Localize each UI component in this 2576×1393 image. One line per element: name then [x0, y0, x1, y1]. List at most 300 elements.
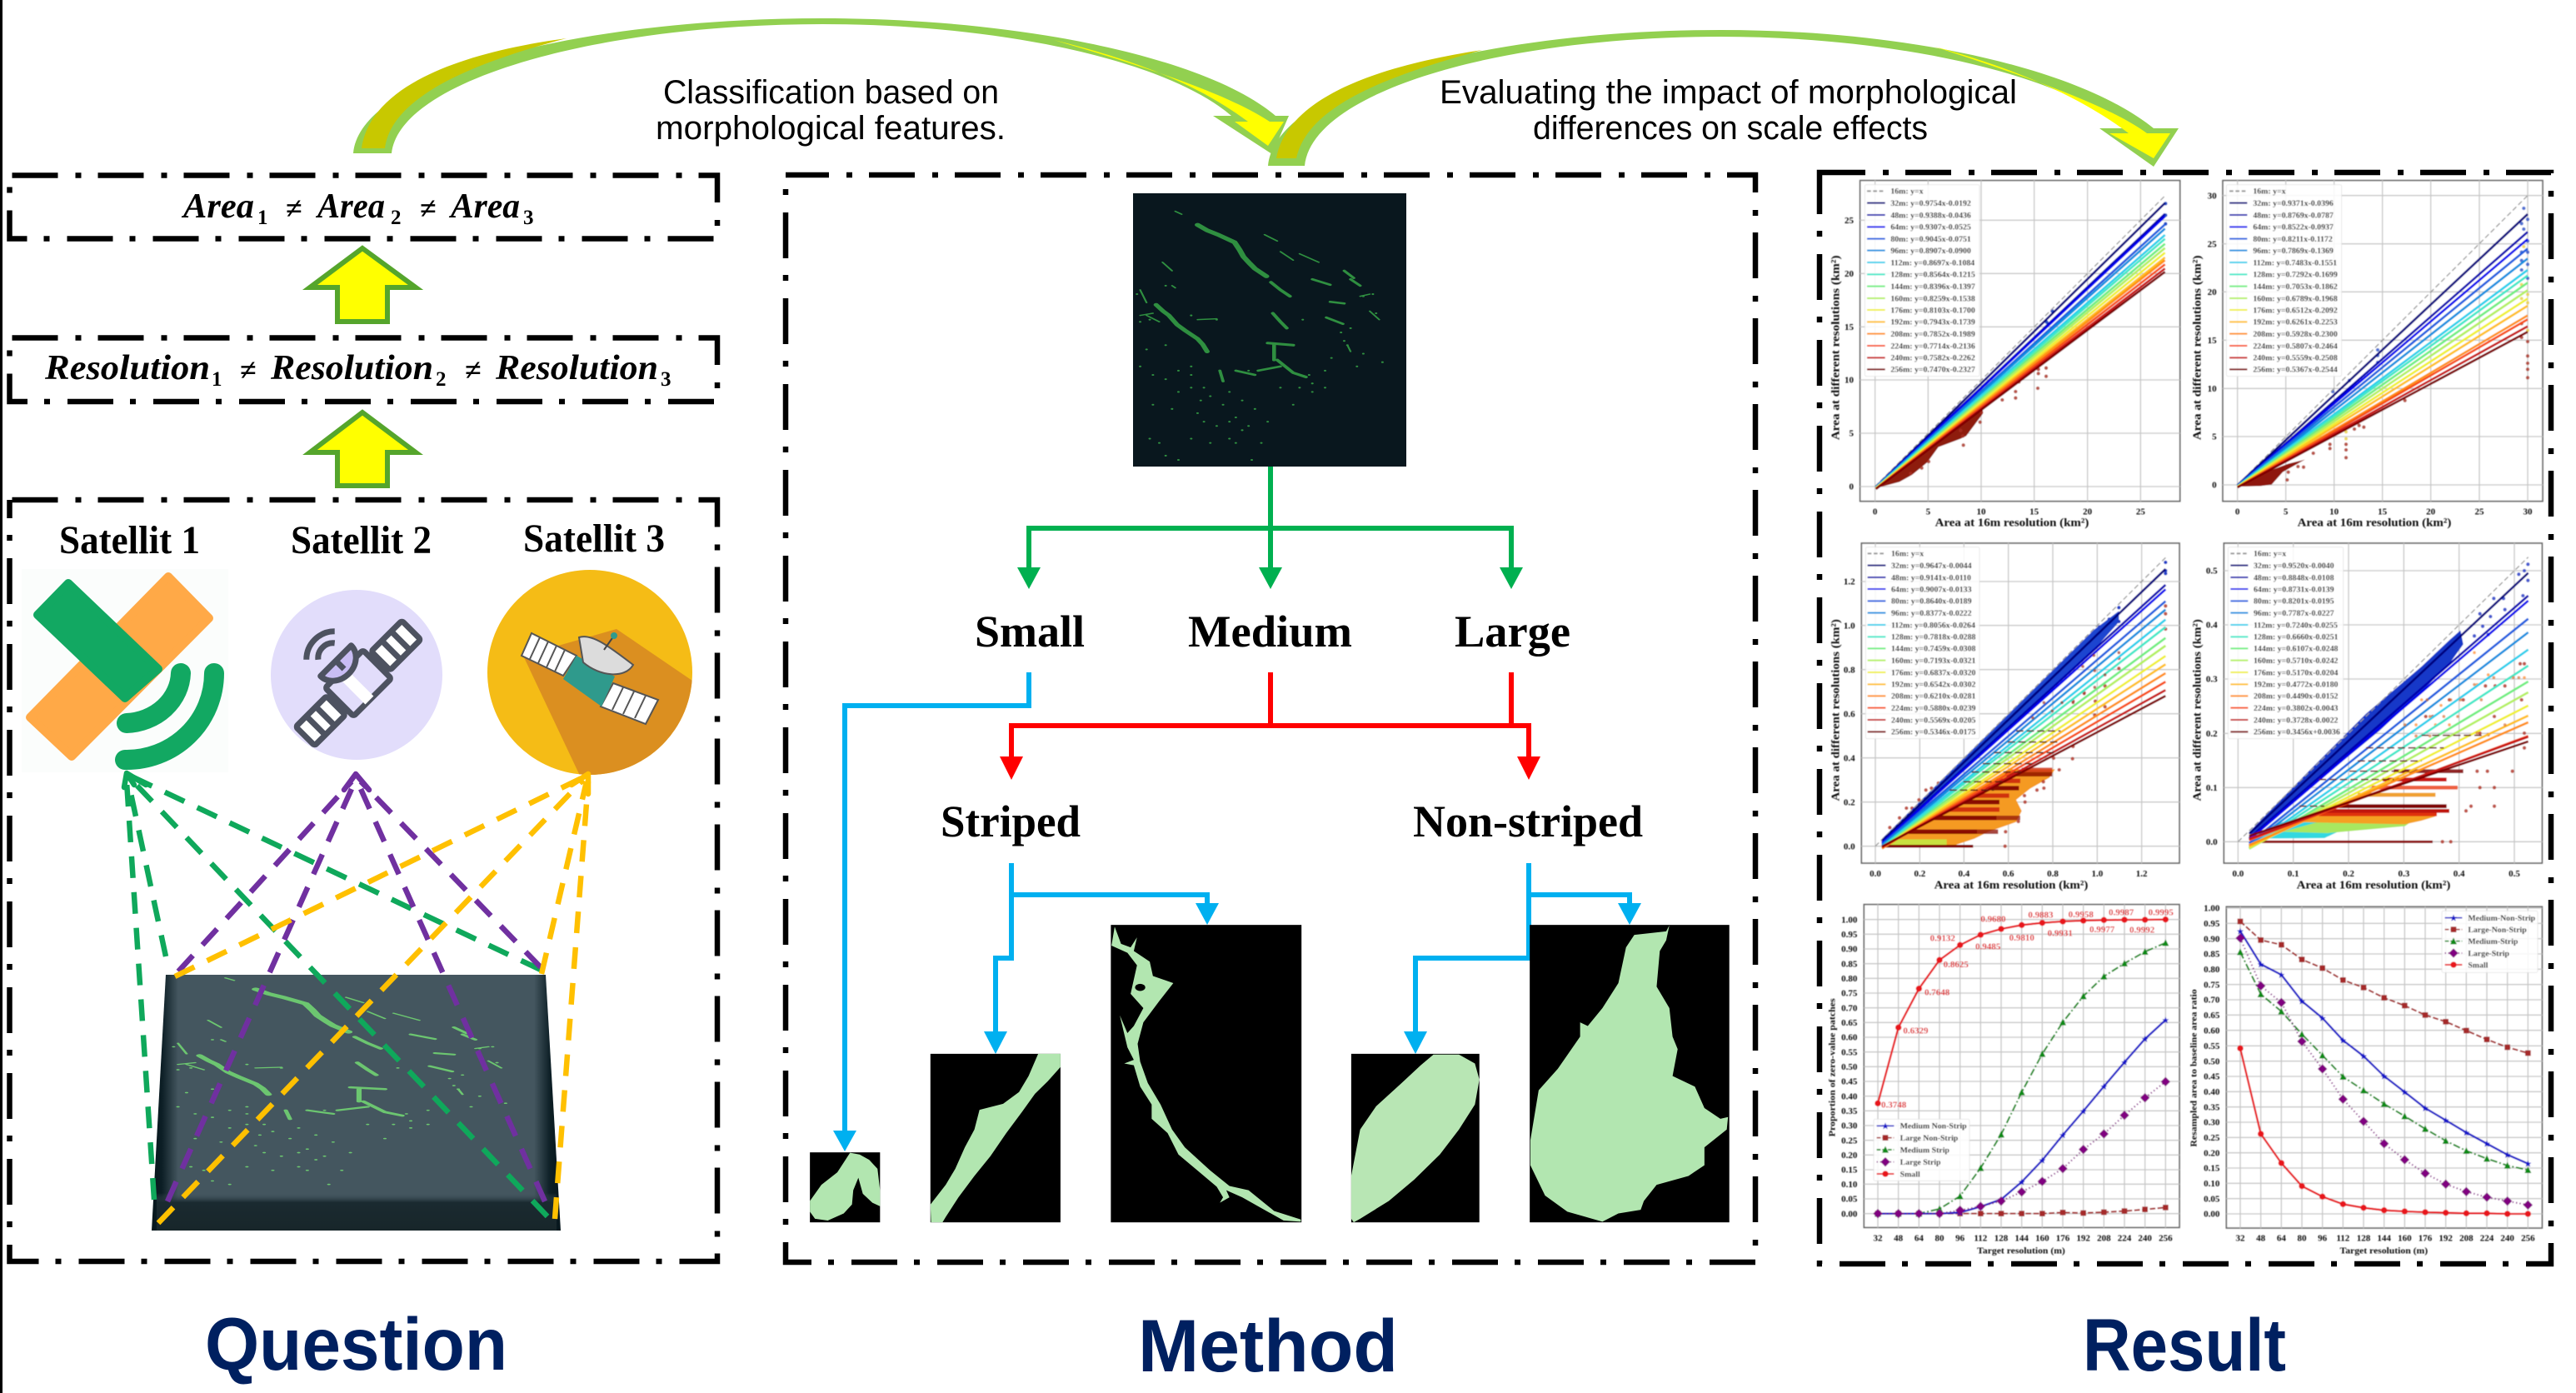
- chart: zero-value proportion lines: 32: [1874, 1233, 1883, 1243]
- dashed lines: satellite 2 coverage: [167, 774, 545, 1201]
- arrow: up to area: [310, 248, 416, 322]
- chart: scatter medium-left: 0.0: [1870, 869, 1881, 879]
- arrow: up to resolution: [310, 412, 416, 486]
- dashed lines: satellite 1 coverage: [124, 773, 547, 1216]
- chart: scatter small-right: 0: [2212, 481, 2217, 491]
- legend: chart 3: 224m: y=0.5880x-0.0239: [1891, 704, 1975, 713]
- legend: chart 1: 64m: y=0.9307x-0.0525: [1890, 223, 1971, 232]
- legend: chart 5: Medium Non-Strip: [1900, 1122, 1967, 1131]
- chart: scatter small-right: 10: [2208, 384, 2217, 394]
- chart: area ratio lines: [2189, 904, 2542, 1256]
- legend: chart 1: 240m: y=0.7582x-0.2262: [1890, 354, 1975, 363]
- chart: area ratio lines: 0.00: [2204, 1210, 2220, 1220]
- chart: zero-value proportion lines: Proportion of zero-value patches: [1828, 998, 1838, 1136]
- chart: area ratio lines: 96: [2318, 1233, 2328, 1243]
- legend: chart 2: 240m: y=0.5559x-0.2508: [2253, 354, 2338, 363]
- panel: satellites: [10, 500, 717, 1261]
- chart: zero-value proportion lines: 0.65: [1841, 1018, 1858, 1028]
- chart: scatter small-right: 0: [2235, 507, 2240, 517]
- chart: zero-value proportion lines: 0.25: [1841, 1136, 1858, 1146]
- legend: chart 3: 176m: y=0.6837x-0.0320: [1891, 668, 1975, 677]
- legend: chart 2: 256m: y=0.5367x-0.2544: [2253, 366, 2338, 375]
- example: small patch: [810, 1152, 880, 1222]
- chart: zero-value proportion lines: 0.75: [1841, 989, 1858, 999]
- data labels: small series: 0.9931: [2048, 929, 2073, 939]
- flow: shape classes: [1000, 672, 1540, 780]
- chart: scatter small-right: Area at 16m resolution (km²): [2298, 517, 2452, 530]
- chart: scatter medium-right: 0.1: [2288, 869, 2299, 879]
- chart: area ratio lines: 192: [2439, 1233, 2453, 1243]
- data labels: small series: 0.9132: [1930, 934, 1955, 944]
- legend: chart 2: 64m: y=0.8522x-0.0937: [2253, 223, 2334, 232]
- legend: chart 1: 16m: y=x: [1890, 187, 1924, 197]
- chart: scatter small-left: Area at different resolutions (km²): [1830, 255, 1842, 440]
- chart: zero-value proportion lines: 0.05: [1841, 1195, 1858, 1205]
- chart: area ratio lines: 0.15: [2204, 1164, 2220, 1174]
- legend: chart 2: 160m: y=0.6789x-0.1968: [2253, 294, 2338, 303]
- legend: chart 1: 80m: y=0.9045x-0.0751: [1890, 235, 1971, 244]
- chart: area ratio lines: 32: [2236, 1233, 2245, 1243]
- chart: scatter small-left: 20: [1845, 269, 1855, 279]
- legend: chart 4: 16m: y=x: [2254, 550, 2286, 559]
- legend: chart 4: 208m: y=0.4490x-0.0152: [2254, 692, 2339, 701]
- chart: area ratio lines: 128: [2357, 1233, 2371, 1243]
- legend: chart 4: 240m: y=0.3728x-0.0022: [2254, 716, 2339, 725]
- dashed lines: satellite 3 coverage: [158, 774, 588, 1223]
- panel: resolution inequality: 1: [212, 368, 222, 391]
- legend: chart 2: 32m: y=0.9371x-0.0396: [2253, 199, 2334, 208]
- chart: zero-value proportion lines: 0.45: [1841, 1077, 1858, 1087]
- chart: zero-value proportion lines: 0.70: [1841, 1003, 1858, 1013]
- chart: zero-value proportion lines: 0.85: [1841, 959, 1858, 969]
- data labels: small series: 0.7648: [1925, 988, 1950, 998]
- panel: resolution inequality: ≠: [465, 353, 482, 387]
- chart: scatter medium-right: Area at 16m resolution (km²): [2297, 880, 2451, 892]
- legend: chart 2: 176m: y=0.6512x-0.2092: [2253, 306, 2338, 315]
- panel: area inequality: 1: [257, 207, 268, 229]
- example: large striped patch: [1111, 925, 1301, 1222]
- series: medium non-strip ratio: [2240, 931, 2528, 1164]
- chart: area ratio lines: 0.25: [2204, 1133, 2220, 1143]
- chart: zero-value proportion lines: Target resolution (m): [1977, 1246, 2065, 1256]
- chart: scatter medium-right: 0.3: [2398, 869, 2410, 879]
- caption: evaluating: Evaluating the impact of morphological: [1440, 74, 2017, 111]
- legend: chart 4: 112m: y=0.7240x-0.0255: [2254, 621, 2338, 630]
- chart: scatter small-right: 30: [2524, 507, 2533, 517]
- panel: resolution inequality: Resolution: [495, 349, 658, 387]
- chart: scatter small-right: 25: [2475, 507, 2484, 517]
- chart: scatter medium-right: 0.1: [2206, 783, 2218, 793]
- chart: area ratio lines: 48: [2256, 1233, 2266, 1243]
- legend: chart 4: [2228, 547, 2344, 739]
- chart: scatter small-right: 20: [2426, 507, 2436, 517]
- example: medium non-striped patch: [1351, 1054, 1480, 1222]
- icon: satellite 2: [262, 587, 442, 760]
- legend: chart 3: 96m: y=0.8377x-0.0222: [1891, 609, 1972, 618]
- data labels: small series: 0.9680: [1980, 914, 2006, 924]
- chart: scatter medium-right: [2191, 543, 2542, 892]
- caption: classification: [656, 74, 1006, 147]
- icon: satellite 1: [22, 569, 228, 772]
- chart: zero-value proportion lines: 0.00: [1841, 1209, 1858, 1219]
- data labels: small series: 0.9958: [2069, 910, 2094, 920]
- chart: area ratio lines: 256: [2521, 1233, 2535, 1243]
- example: large non-striped patch: [1530, 925, 1730, 1222]
- chart: scatter medium-left: 1.2: [2136, 869, 2148, 879]
- chart: scatter small-right: 10: [2329, 507, 2339, 517]
- data labels: small series: 0.9485: [1975, 942, 2001, 952]
- caption: evaluating: [1440, 74, 2017, 147]
- data labels: small series: 0.9987: [2109, 907, 2134, 917]
- legend: chart 1: 256m: y=0.7470x-0.2327: [1890, 366, 1975, 375]
- legend: chart 2: 48m: y=0.8769x-0.0787: [2253, 211, 2334, 220]
- chart: scatter medium-right: 0.4: [2454, 869, 2465, 879]
- legend: chart 1: 128m: y=0.8564x-0.1215: [1890, 271, 1975, 280]
- chart: area ratio lines: 0.35: [2204, 1102, 2220, 1112]
- data labels: small series: 0.9992: [2129, 925, 2155, 935]
- legend: chart 3: [1865, 547, 1979, 739]
- series: large non-strip ratio: [2240, 921, 2528, 1053]
- panel: area inequality: 3: [523, 207, 533, 229]
- legend: chart 2: 80m: y=0.8211x-0.1172: [2253, 235, 2333, 244]
- chart: zero-value proportion lines: 0.35: [1841, 1106, 1858, 1116]
- panel: area inequality: Area: [181, 187, 254, 226]
- data labels: small series: 0.6329: [1903, 1026, 1929, 1036]
- chart: scatter small-right: [2191, 181, 2543, 530]
- legend: chart 5: Medium Strip: [1900, 1146, 1949, 1155]
- legend: chart 4: 160m: y=0.5710x-0.0242: [2254, 657, 2339, 666]
- chart: scatter medium-left: 0.2: [1914, 869, 1926, 879]
- chart: area ratio lines: 0.45: [2204, 1072, 2220, 1082]
- chart: scatter medium-left: [1830, 543, 2179, 892]
- legend: chart 5: Large Non-Strip: [1900, 1134, 1959, 1143]
- chart: scatter small-right: Area at different resolutions (km²): [2191, 255, 2204, 440]
- chart: zero-value proportion lines: 208: [2097, 1233, 2111, 1243]
- legend: chart 5: Small: [1900, 1170, 1920, 1179]
- panel: area inequality: ≠: [286, 192, 302, 225]
- chart: zero-value proportion lines: 256: [2159, 1233, 2173, 1243]
- legend: chart 4: 48m: y=0.8848x-0.0108: [2254, 573, 2334, 582]
- legend: chart 1: 112m: y=0.8697x-0.1084: [1890, 258, 1974, 267]
- chart: area ratio lines: 64: [2277, 1233, 2286, 1243]
- chart: area ratio lines: 208: [2459, 1233, 2474, 1243]
- chart: area ratio lines: 0.65: [2204, 1011, 2220, 1021]
- chart: scatter small-left: 25: [2136, 507, 2145, 517]
- chart: scatter small-left: 5: [1926, 507, 1931, 517]
- legend: chart 1: 224m: y=0.7714x-0.2136: [1890, 342, 1975, 351]
- chart: area ratio lines: 0.50: [2204, 1056, 2220, 1066]
- chart: zero-value proportion lines: 0.60: [1841, 1033, 1858, 1043]
- chart: area ratio lines: 0.20: [2204, 1148, 2220, 1158]
- legend: chart 5: Large Strip: [1900, 1158, 1941, 1167]
- chart: scatter small-left: 15: [1845, 322, 1855, 332]
- chart: scatter small-left: 10: [1845, 376, 1855, 386]
- legend: chart 1: 32m: y=0.9754x-0.0192: [1890, 199, 1971, 208]
- chart: scatter small-left: 15: [2029, 507, 2039, 517]
- chart: zero-value proportion lines: 80: [1935, 1233, 1944, 1243]
- flow: size classes: [1017, 467, 1523, 589]
- chart: scatter medium-left: 1.2: [1844, 577, 1855, 587]
- example: medium striped patch: [931, 1054, 1061, 1222]
- legend: chart 4: 256m: y=0.3456x+0.0036: [2254, 728, 2340, 737]
- label: satellit 3: Satellit 3: [523, 517, 665, 561]
- data labels: small series: 0.9810: [2009, 933, 2034, 943]
- chart: scatter small-right: 30: [2208, 191, 2217, 201]
- legend: chart 1: 176m: y=0.8103x-0.1700: [1890, 306, 1975, 315]
- legend: chart 6: Large-Non-Strip: [2468, 926, 2527, 935]
- legend: chart 4: 96m: y=0.7787x-0.0227: [2254, 609, 2334, 618]
- legend: chart 2: 112m: y=0.7483x-0.1551: [2253, 258, 2337, 267]
- legend: chart 3: 64m: y=0.9007x-0.0133: [1891, 585, 1972, 594]
- chart: area ratio lines: 0.85: [2204, 950, 2220, 960]
- chart: area ratio lines: 112: [2336, 1233, 2350, 1243]
- chart: area ratio lines: 0.95: [2204, 919, 2220, 929]
- chart: scatter medium-right: 0.4: [2206, 621, 2218, 631]
- series: large strip ratio: [2240, 938, 2528, 1205]
- legend: chart 6: Medium-Strip: [2468, 937, 2519, 946]
- legend: chart 6: Medium-Non-Strip: [2468, 914, 2536, 923]
- chart: zero-value proportion lines: 1.00: [1841, 915, 1858, 925]
- legend: chart 1: 144m: y=0.8396x-0.1397: [1890, 282, 1975, 292]
- chart: zero-value proportion lines: 128: [1994, 1233, 2009, 1243]
- heading: method: Method: [1138, 1304, 1398, 1387]
- label: small: Small: [975, 607, 1085, 657]
- legend: chart 3: 112m: y=0.8056x-0.0264: [1891, 621, 1975, 630]
- chart: area ratio lines: 0.75: [2204, 980, 2220, 990]
- legend: chart 2: 128m: y=0.7292x-0.1699: [2253, 271, 2338, 280]
- arrow: method to result: [1268, 30, 2179, 167]
- chart: zero-value proportion lines: 0.95: [1841, 930, 1858, 940]
- label: striped: Striped: [941, 796, 1081, 846]
- legend: chart 6: Small: [2468, 961, 2489, 970]
- legend: chart 2: [2226, 185, 2342, 377]
- chart: zero-value proportion lines: 64: [1915, 1233, 1924, 1243]
- chart: scatter medium-right: 0.5: [2509, 869, 2520, 879]
- chart: scatter medium-right: 0.0: [2206, 837, 2218, 847]
- chart: zero-value proportion lines: 224: [2118, 1233, 2132, 1243]
- data labels: small series: 0.3748: [1881, 1101, 1907, 1111]
- series: small: [1878, 920, 2165, 1103]
- chart: zero-value proportion lines: 96: [1955, 1233, 1965, 1243]
- legend: chart 2: 16m: y=x: [2253, 187, 2286, 197]
- chart: scatter small-right: 5: [2284, 507, 2289, 517]
- legend: chart 2: 224m: y=0.5807x-0.2464: [2253, 342, 2338, 351]
- chart: zero-value proportion lines: 0.80: [1841, 974, 1858, 984]
- chart: zero-value proportion lines: 0.50: [1841, 1062, 1858, 1072]
- chart: area ratio lines: 240: [2500, 1233, 2514, 1243]
- legend: chart 3: 48m: y=0.9141x-0.0110: [1891, 573, 1971, 582]
- chart: scatter medium-left: 0.4: [1958, 869, 1970, 879]
- chart: zero-value proportion lines: 0.55: [1841, 1047, 1858, 1057]
- panel: result: [1820, 172, 2551, 1264]
- chart: scatter medium-left: 0.4: [1844, 753, 1855, 763]
- image: satellite scene: [1133, 193, 1406, 467]
- chart: scatter medium-left: 0.6: [1844, 709, 1855, 719]
- panel: area inequality: Area: [315, 187, 385, 226]
- chart: area ratio lines: 224: [2480, 1233, 2494, 1243]
- legend: chart 2: 144m: y=0.7053x-0.1862: [2253, 282, 2338, 292]
- legend: chart 1: 48m: y=0.9388x-0.0436: [1890, 211, 1971, 220]
- chart: scatter medium-right: 0.5: [2206, 567, 2218, 577]
- label: large: Large: [1455, 607, 1570, 657]
- label: satellit 1: Satellit 1: [59, 518, 200, 562]
- legend: chart 4: 224m: y=0.3802x-0.0043: [2254, 704, 2339, 713]
- flow: striped to examples: [984, 863, 1219, 1054]
- data labels: small series: 0.9883: [2028, 910, 2054, 920]
- legend: chart 1: 96m: y=0.8907x-0.0900: [1890, 247, 1971, 256]
- caption: classification: Classification based on: [663, 74, 999, 111]
- chart: area ratio lines: 0.30: [2204, 1118, 2220, 1128]
- chart: zero-value proportion lines: 160: [2035, 1233, 2049, 1243]
- legend: chart 3: 160m: y=0.7193x-0.0321: [1891, 657, 1975, 666]
- legend: chart 3: 256m: y=0.5346x-0.0175: [1891, 728, 1975, 737]
- legend: chart 1: 192m: y=0.7943x-0.1739: [1890, 318, 1975, 327]
- chart: scatter medium-left: 0.0: [1844, 841, 1855, 851]
- chart: zero-value proportion lines: 0.90: [1841, 945, 1858, 955]
- data labels: small series: 0.9995: [2149, 907, 2174, 917]
- series: small ratio: [2240, 1048, 2528, 1214]
- heading: result: Result: [2083, 1303, 2286, 1386]
- label: satellit 2: Satellit 2: [291, 518, 432, 562]
- heading: question: Question: [205, 1302, 507, 1386]
- chart: scatter small-left: Area at 16m resolution (km²): [1935, 517, 2089, 530]
- chart: scatter small-right: 25: [2208, 239, 2217, 249]
- panel: resolution inequality: Resolution: [44, 349, 210, 387]
- chart: scatter medium-left: Area at different resolutions (km²): [1830, 619, 1842, 801]
- chart: scatter small-right: 15: [2208, 336, 2217, 346]
- legend: chart 3: 16m: y=x: [1891, 550, 1924, 559]
- chart: scatter medium-right: Area at different resolutions (km²): [2191, 619, 2204, 801]
- data labels: small series: 0.8625: [1944, 960, 1969, 970]
- chart: zero-value proportion lines: 112: [1974, 1233, 1988, 1243]
- chart: area ratio lines: 80: [2298, 1233, 2307, 1243]
- chart: scatter small-right: 5: [2212, 432, 2217, 442]
- series: large non-strip: [1878, 1207, 2165, 1214]
- chart: scatter small-left: 10: [1977, 507, 1986, 517]
- panel: area inequality: 2: [391, 207, 402, 229]
- panel: method: [786, 175, 1755, 1262]
- series: medium strip ratio: [2240, 952, 2528, 1170]
- legend: chart 4: 144m: y=0.6107x-0.0248: [2254, 645, 2339, 654]
- legend: chart 3: 128m: y=0.7818x-0.0288: [1891, 633, 1975, 642]
- chart: zero-value proportion lines: 48: [1894, 1233, 1904, 1243]
- chart: area ratio lines: 176: [2419, 1233, 2433, 1243]
- chart: area ratio lines: 0.90: [2204, 934, 2220, 944]
- chart: area ratio lines: 1.00: [2204, 904, 2220, 914]
- legend: chart 6: [2442, 911, 2538, 972]
- chart: zero-value proportion lines: 0.15: [1841, 1166, 1858, 1176]
- legend: chart 3: 240m: y=0.5569x-0.0205: [1891, 716, 1975, 725]
- label: non-striped: Non-striped: [1413, 796, 1643, 846]
- chart: scatter small-left: 0: [1873, 507, 1878, 517]
- chart: area ratio lines: Resampled area to baseline area ratio: [2189, 989, 2199, 1147]
- chart: scatter small-left: 20: [2083, 507, 2093, 517]
- flow: small to example: [833, 672, 1029, 1151]
- panel: resolution inequality: [10, 338, 717, 402]
- chart: scatter medium-left: 0.8: [1844, 665, 1855, 675]
- image: 3D water body block: [152, 975, 561, 1231]
- legend: chart 1: 160m: y=0.8259x-0.1538: [1890, 294, 1975, 303]
- legend: chart 3: 192m: y=0.6542x-0.0302: [1891, 681, 1975, 690]
- flow: non-striped to examples: [1404, 863, 1641, 1054]
- chart: zero-value proportion lines: [1828, 905, 2179, 1256]
- chart: scatter medium-left: Area at 16m resolution (km²): [1934, 880, 2089, 892]
- data labels: small series: [1881, 907, 2174, 1111]
- chart: scatter small-right: 15: [2378, 507, 2388, 517]
- chart: area ratio lines: 0.70: [2204, 996, 2220, 1006]
- legend: chart 5: [1874, 1119, 1969, 1181]
- chart: scatter small-right: 20: [2208, 287, 2217, 297]
- legend: chart 2: 96m: y=0.7869x-0.1369: [2253, 247, 2334, 256]
- chart: scatter small-left: 5: [1849, 429, 1854, 439]
- arrow: question to method: [353, 18, 1289, 154]
- chart: area ratio lines: 0.10: [2204, 1179, 2220, 1189]
- legend: chart 4: 64m: y=0.8731x-0.0139: [2254, 585, 2334, 594]
- chart: scatter small-left: 25: [1845, 216, 1855, 226]
- chart: scatter medium-left: 0.8: [2047, 869, 2059, 879]
- chart: zero-value proportion lines: 176: [2056, 1233, 2070, 1243]
- series: large strip: [1878, 1081, 2165, 1214]
- chart: zero-value proportion lines: 0.40: [1841, 1091, 1858, 1101]
- legend: chart 2: 208m: y=0.5928x-0.2300: [2253, 330, 2338, 339]
- chart: area ratio lines: 0.55: [2204, 1041, 2220, 1051]
- chart: scatter medium-left: 1.0: [2091, 869, 2104, 879]
- chart: scatter medium-right: 0.3: [2206, 675, 2218, 685]
- chart: area ratio lines: Target resolution (m): [2339, 1246, 2429, 1256]
- chart: area ratio lines: 0.80: [2204, 965, 2220, 975]
- legend: chart 4: 192m: y=0.4772x-0.0180: [2254, 681, 2339, 690]
- panel: resolution inequality: 3: [661, 368, 671, 391]
- chart: zero-value proportion lines: 240: [2138, 1233, 2152, 1243]
- panel: resolution inequality: 2: [436, 368, 447, 391]
- chart: area ratio lines: 144: [2377, 1233, 2391, 1243]
- chart: scatter medium-left: 0.6: [2003, 869, 2014, 879]
- series: medium non-strip: [1878, 1020, 2165, 1214]
- chart: zero-value proportion lines: 144: [2014, 1233, 2029, 1243]
- chart: zero-value proportion lines: 0.20: [1841, 1151, 1858, 1161]
- chart: zero-value proportion lines: 0.10: [1841, 1180, 1858, 1190]
- chart: zero-value proportion lines: 192: [2076, 1233, 2090, 1243]
- chart: scatter medium-right: 0.2: [2343, 869, 2354, 879]
- data labels: small series: 0.9977: [2089, 925, 2115, 935]
- legend: chart 4: 32m: y=0.9520x-0.0040: [2254, 562, 2334, 571]
- panel: area inequality: Area: [448, 187, 520, 226]
- legend: chart 4: 128m: y=0.6660x-0.0251: [2254, 633, 2339, 642]
- panel: resolution inequality: Resolution: [270, 349, 433, 387]
- legend: chart 4: 176m: y=0.5170x-0.0204: [2254, 668, 2339, 677]
- legend: chart 1: 208m: y=0.7852x-0.1989: [1890, 330, 1975, 339]
- chart: area ratio lines: 0.60: [2204, 1026, 2220, 1036]
- caption: classification: morphological features.: [656, 110, 1006, 147]
- chart: scatter small-left: 0: [1849, 482, 1854, 492]
- legend: chart 3: 80m: y=0.8640x-0.0189: [1891, 597, 1972, 607]
- chart: scatter medium-right: 0.0: [2232, 869, 2244, 879]
- legend: chart 3: 208m: y=0.6210x-0.0281: [1891, 692, 1975, 701]
- panel: area inequality: [10, 175, 717, 238]
- panel: area inequality: ≠: [420, 192, 437, 225]
- legend: chart 6: Large-Strip: [2468, 949, 2510, 958]
- chart: scatter medium-right: 0.2: [2206, 729, 2218, 739]
- chart: area ratio lines: 0.40: [2204, 1087, 2220, 1097]
- series: medium strip: [1878, 943, 2165, 1214]
- chart: scatter small-left: [1830, 181, 2180, 530]
- chart: zero-value proportion lines: 0.30: [1841, 1121, 1858, 1131]
- panel: resolution inequality: ≠: [240, 353, 257, 387]
- label: medium: Medium: [1188, 607, 1352, 657]
- icon: satellite 3: [487, 570, 692, 775]
- legend: chart 4: 80m: y=0.8201x-0.0195: [2254, 597, 2334, 607]
- chart: area ratio lines: 160: [2398, 1233, 2412, 1243]
